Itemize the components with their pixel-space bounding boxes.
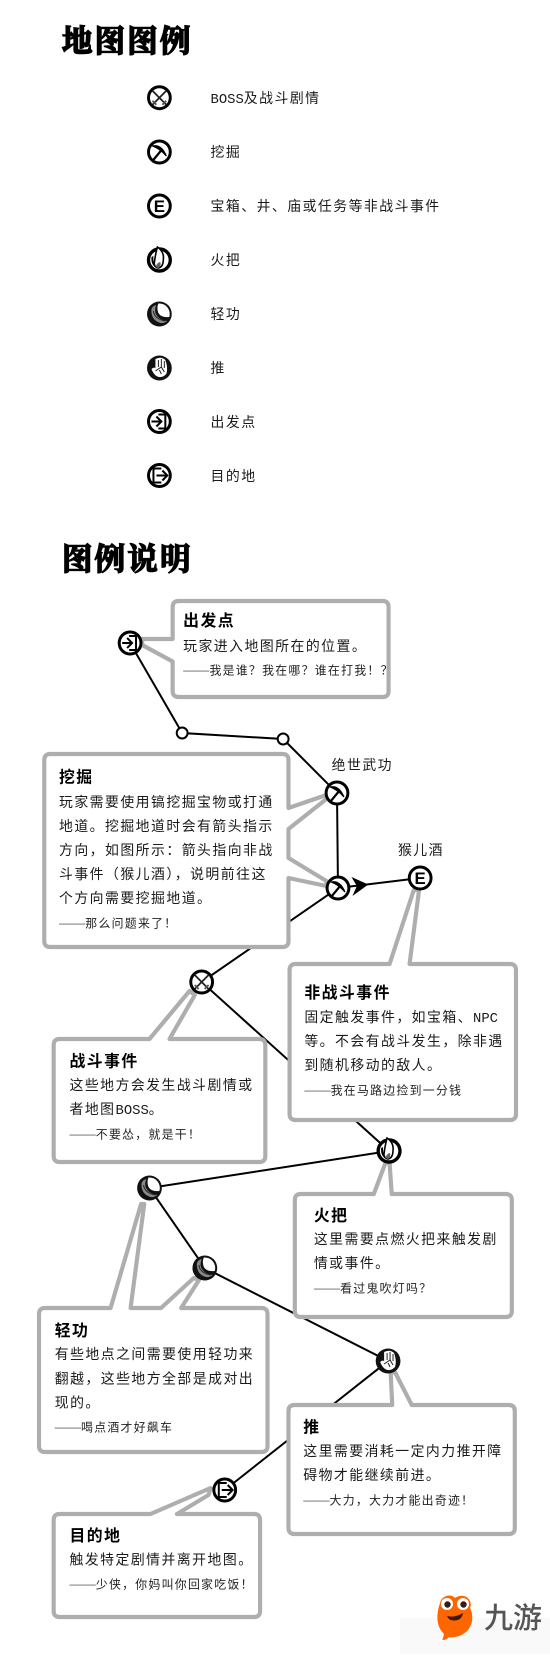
node: start xyxy=(119,632,141,654)
callout body: 个方向需要挖掘地道。 xyxy=(59,890,212,906)
node: dig 1 xyxy=(326,782,348,804)
callout quote: ——看过鬼吹灯吗？ xyxy=(314,1280,432,1296)
callout body xyxy=(69,1077,254,1119)
node: event xyxy=(409,867,431,889)
icon: start xyxy=(148,410,170,432)
callout body: 这里需要点燃火把来触发剧 xyxy=(314,1231,498,1247)
arrow: dig direction xyxy=(351,877,368,896)
label: peerless skill: 绝世武功 xyxy=(332,757,393,773)
icon: BOSS xyxy=(148,87,170,109)
callout quote: ——大力，大力才能出奇迹！ xyxy=(303,1492,474,1508)
callout body: 地道。挖掘地道时会有箭头指示 xyxy=(59,818,274,834)
label: monkey wine: 猴儿酒 xyxy=(398,842,444,858)
node: push xyxy=(376,1348,400,1374)
callout heading: 战斗事件 xyxy=(69,1051,139,1071)
callout body xyxy=(55,1346,254,1411)
legend label: push: 推 xyxy=(211,360,226,376)
node: combat xyxy=(191,971,213,993)
callout body: 固定触发事件，如宝箱、NPC xyxy=(304,1009,498,1027)
callout body: 这里需要消耗一定内力推开障 xyxy=(303,1443,503,1459)
icon: event: E xyxy=(154,197,165,216)
icon: dig xyxy=(148,141,170,163)
callout body: 这些地方会发生战斗剧情或 xyxy=(69,1077,254,1093)
callout body: 到随机移动的敌人。 xyxy=(304,1057,442,1073)
callout: combat event xyxy=(54,991,265,1162)
callout body: 现的。 xyxy=(55,1394,101,1411)
icon: destination xyxy=(148,464,170,486)
route lines xyxy=(130,643,420,1490)
legend label: torch: 火把 xyxy=(211,252,241,268)
node: waypoint xyxy=(278,734,289,744)
callout body: 等。不会有战斗发生，除非遇 xyxy=(304,1033,504,1049)
callout body xyxy=(314,1231,498,1271)
callout body: 玩家进入地图所在的位置。 xyxy=(183,638,367,654)
callout: qinggong xyxy=(39,1204,267,1452)
node: qinggong 2 xyxy=(192,1256,217,1280)
node: destination xyxy=(214,1479,236,1501)
callout body: 有些地点之间需要使用轻功来 xyxy=(55,1346,254,1362)
legend label: dig: 挖掘 xyxy=(211,144,241,160)
node: event: E xyxy=(415,869,426,888)
callout body: 情或事件。 xyxy=(314,1255,391,1271)
callout body xyxy=(304,1009,504,1073)
callout heading: 轻功 xyxy=(55,1322,89,1340)
icon: event xyxy=(148,195,170,217)
callout heading: 挖掘 xyxy=(59,767,94,787)
callout heading: 推 xyxy=(303,1418,321,1437)
callout body: 翻越，这些地方全部是成对出 xyxy=(55,1370,254,1387)
callout heading: 目的地 xyxy=(69,1527,121,1545)
legend label: qinggong: 轻功 xyxy=(211,306,241,322)
callout quote: ——我在马路边捡到一分钱 xyxy=(304,1082,462,1098)
callout: torch xyxy=(295,1163,512,1317)
title: legend explanation: 图例说明 xyxy=(62,543,192,577)
node: torch xyxy=(378,1138,400,1162)
callout body: 方向，如图所示：箭头指向非战 xyxy=(59,842,274,858)
callout: start xyxy=(142,601,394,697)
legend label: start: 出发点 xyxy=(211,414,257,430)
legend list xyxy=(147,87,441,486)
node: waypoint xyxy=(177,728,188,738)
callout quote: ——少侠，你妈叫你回家吃饭！ xyxy=(69,1576,254,1592)
callout quote: ——不要怂，就是干！ xyxy=(69,1126,201,1142)
icon: push xyxy=(147,356,172,380)
legend label: event: 宝箱、井、庙或任务等非战斗事件 xyxy=(211,198,441,214)
callout: push xyxy=(288,1372,515,1534)
callout quote: ——我是谁？我在哪？谁在打我！？ xyxy=(183,662,394,678)
legend label: BOSS: BOSS及战斗剧情 xyxy=(211,90,321,108)
callout body: 玩家需要使用镐挖掘宝物或打通 xyxy=(59,794,274,810)
callout body: 者地图BOSS。 xyxy=(69,1101,164,1119)
node: dig 2 xyxy=(327,877,349,899)
callout body: 碍物才能继续前进。 xyxy=(303,1467,441,1483)
logo: 九游: 九游 xyxy=(484,1602,542,1635)
icon: torch xyxy=(148,247,170,271)
callout body xyxy=(303,1443,503,1483)
legend label: destination: 目的地 xyxy=(211,468,257,484)
callout heading: 非战斗事件 xyxy=(304,983,391,1002)
callout: dig xyxy=(44,754,326,947)
callout body: 触发特定剧情并离开地图。 xyxy=(69,1551,254,1568)
callout heading: 出发点 xyxy=(183,611,235,630)
logo: 九游 xyxy=(400,1595,550,1654)
callout quote: ——那么问题来了！ xyxy=(59,915,177,931)
callout: destination xyxy=(54,1488,260,1617)
title: map legend: 地图图例 xyxy=(62,25,192,59)
icon: qinggong xyxy=(147,302,172,326)
callout quote: ——喝点酒才好飙车 xyxy=(55,1419,173,1435)
callout heading: 火把 xyxy=(314,1207,348,1225)
callout body xyxy=(59,794,274,906)
node: qinggong 1 xyxy=(137,1176,162,1200)
callout body: 斗事件（猴儿酒），说明前往这 xyxy=(59,866,267,882)
callout: non-combat event xyxy=(290,890,516,1120)
